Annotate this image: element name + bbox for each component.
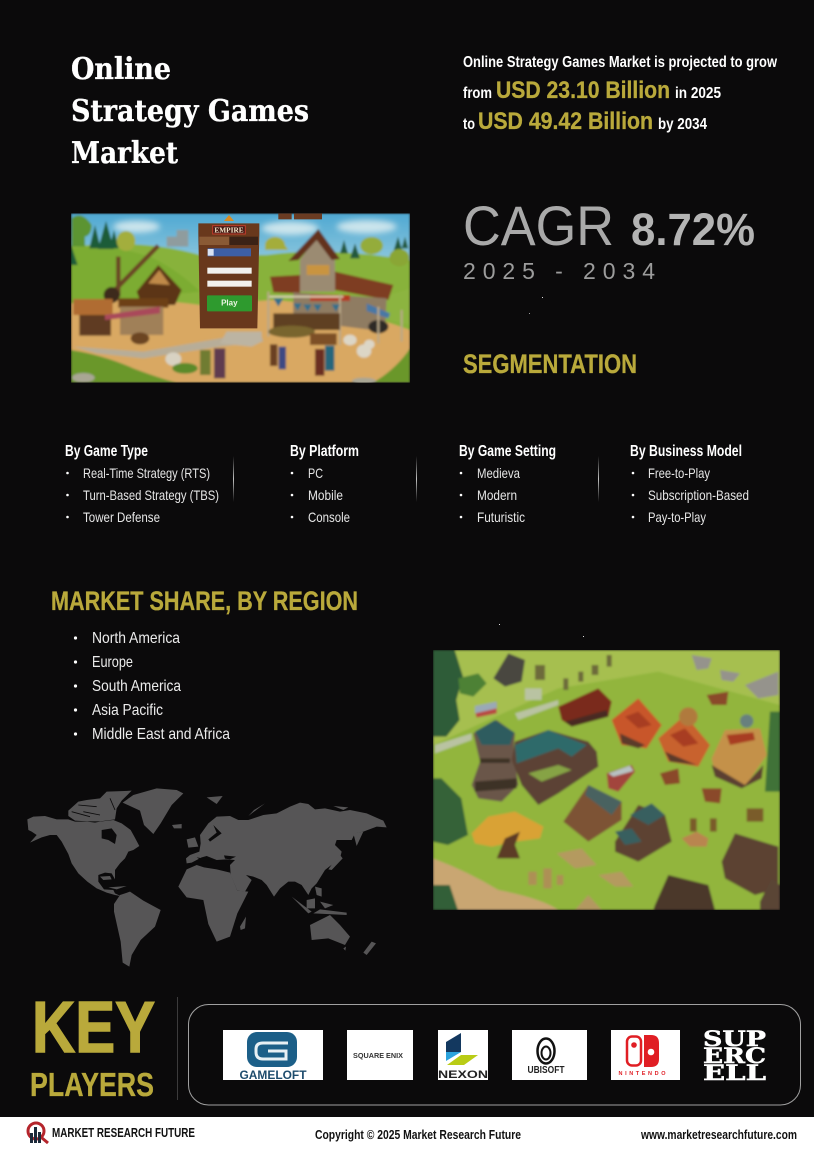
segmentation: by game setting: Medieva: [477, 465, 520, 481]
footer brand: MARKET RESEARCH FUTURE: [52, 1126, 195, 1140]
title: Online: [71, 52, 171, 87]
title: [71, 52, 309, 171]
footer bar: [0, 1117, 814, 1150]
market projection text: [463, 54, 778, 135]
segmentation: by game type: By Game Type: [65, 443, 148, 460]
footer logo: [28, 1123, 48, 1143]
greenland: [123, 788, 183, 834]
footer copyright: Copyright © 2025 Market Research Future: [315, 1127, 521, 1142]
CAGR: CAGR: [463, 194, 614, 257]
segmentation: by game setting: Futuristic: [477, 509, 525, 525]
segmentation: by game type: [65, 443, 219, 525]
market projection text: USD 49.42 Billion: [478, 108, 653, 135]
region list: [74, 630, 230, 743]
login panel: Play: [221, 299, 238, 308]
logo: nintendo: NINTENDO: [618, 1071, 666, 1077]
key players heading: KEY: [32, 988, 155, 1068]
segmentation: by platform: Mobile: [308, 487, 343, 503]
logo: supercell: ERC: [703, 1043, 766, 1068]
key players heading: [30, 988, 155, 1103]
logo: gameloft: GAMELOFT: [240, 1068, 307, 1082]
inland seas: [102, 825, 236, 862]
logo: nintendo: [611, 1030, 680, 1080]
logo: gameloft: [223, 1030, 323, 1082]
segmentation: by business model: By Business Model: [630, 443, 742, 460]
region list: Europe: [92, 654, 133, 671]
key players panel: [188, 1004, 800, 1105]
segmentation: by platform: [290, 443, 359, 525]
CAGR: 2025 - 2034: [463, 258, 655, 284]
logo: nexon: [438, 1030, 488, 1081]
segmentation: by business model: [630, 443, 749, 525]
logo: supercell: ELL: [703, 1060, 766, 1085]
arctic archipelago: [68, 791, 132, 821]
segmentation: by platform: Console: [308, 509, 350, 525]
segmentation: by game type: Tower Defense: [83, 509, 160, 525]
south america: [114, 892, 161, 967]
segmentation: by game setting: By Game Setting: [459, 443, 556, 460]
logo: ubisoft: [512, 1030, 587, 1080]
segmentation: by game type: Real-Time Strategy (RTS): [83, 465, 210, 481]
logo: supercell: SUP: [703, 1026, 766, 1051]
key players heading: PLAYERS: [30, 1066, 154, 1103]
region list: North America: [92, 630, 180, 647]
logo: ubisoft: UBISOFT: [528, 1065, 564, 1076]
market projection text: from: [463, 85, 492, 102]
segmentation: by business model: Pay-to-Play: [648, 509, 706, 525]
africa: [178, 865, 248, 942]
login panel: [198, 213, 322, 328]
north america: [27, 816, 139, 896]
game screenshot: login scene: [71, 213, 410, 384]
market projection text: USD 23.10 Billion: [496, 77, 670, 104]
CAGR: [463, 194, 755, 284]
market projection text: in 2025: [675, 85, 721, 102]
region list: Asia Pacific: [92, 702, 163, 719]
islands: [100, 796, 376, 955]
segmentation: by game setting: Modern: [477, 487, 517, 503]
world map: [27, 788, 387, 967]
segmentation: by business model: Free-to-Play: [648, 465, 710, 481]
segmentation: by game type: Turn-Based Strategy (TBS): [83, 487, 219, 503]
game screenshot: isometric village: [433, 650, 780, 910]
segmentation: by game setting: [459, 443, 556, 525]
logo: square enix: SQUARE ENIX: [353, 1053, 403, 1060]
logo: supercell: [703, 1026, 766, 1085]
logo: nexon: NEXON: [438, 1069, 488, 1081]
region list: Middle East and Africa: [92, 726, 230, 743]
iceland: [172, 824, 182, 828]
segmentation: by platform: By Platform: [290, 443, 359, 460]
market projection text: by 2034: [658, 116, 707, 133]
login panel: EMPIRE: [214, 225, 244, 234]
segmentation: by platform: PC: [308, 465, 323, 481]
market share heading: MARKET SHARE, BY REGION: [51, 586, 358, 616]
segmentation: by business model: Subscription-Based: [648, 487, 749, 503]
segmentation heading: SEGMENTATION: [463, 349, 637, 379]
market projection text: to: [463, 116, 475, 133]
title: Market: [71, 136, 178, 171]
eurasia: [186, 803, 387, 897]
title: Strategy Games: [71, 94, 309, 129]
logo: square enix: [347, 1030, 413, 1080]
CAGR: 8.72%: [631, 204, 755, 255]
region list: South America: [92, 678, 181, 695]
